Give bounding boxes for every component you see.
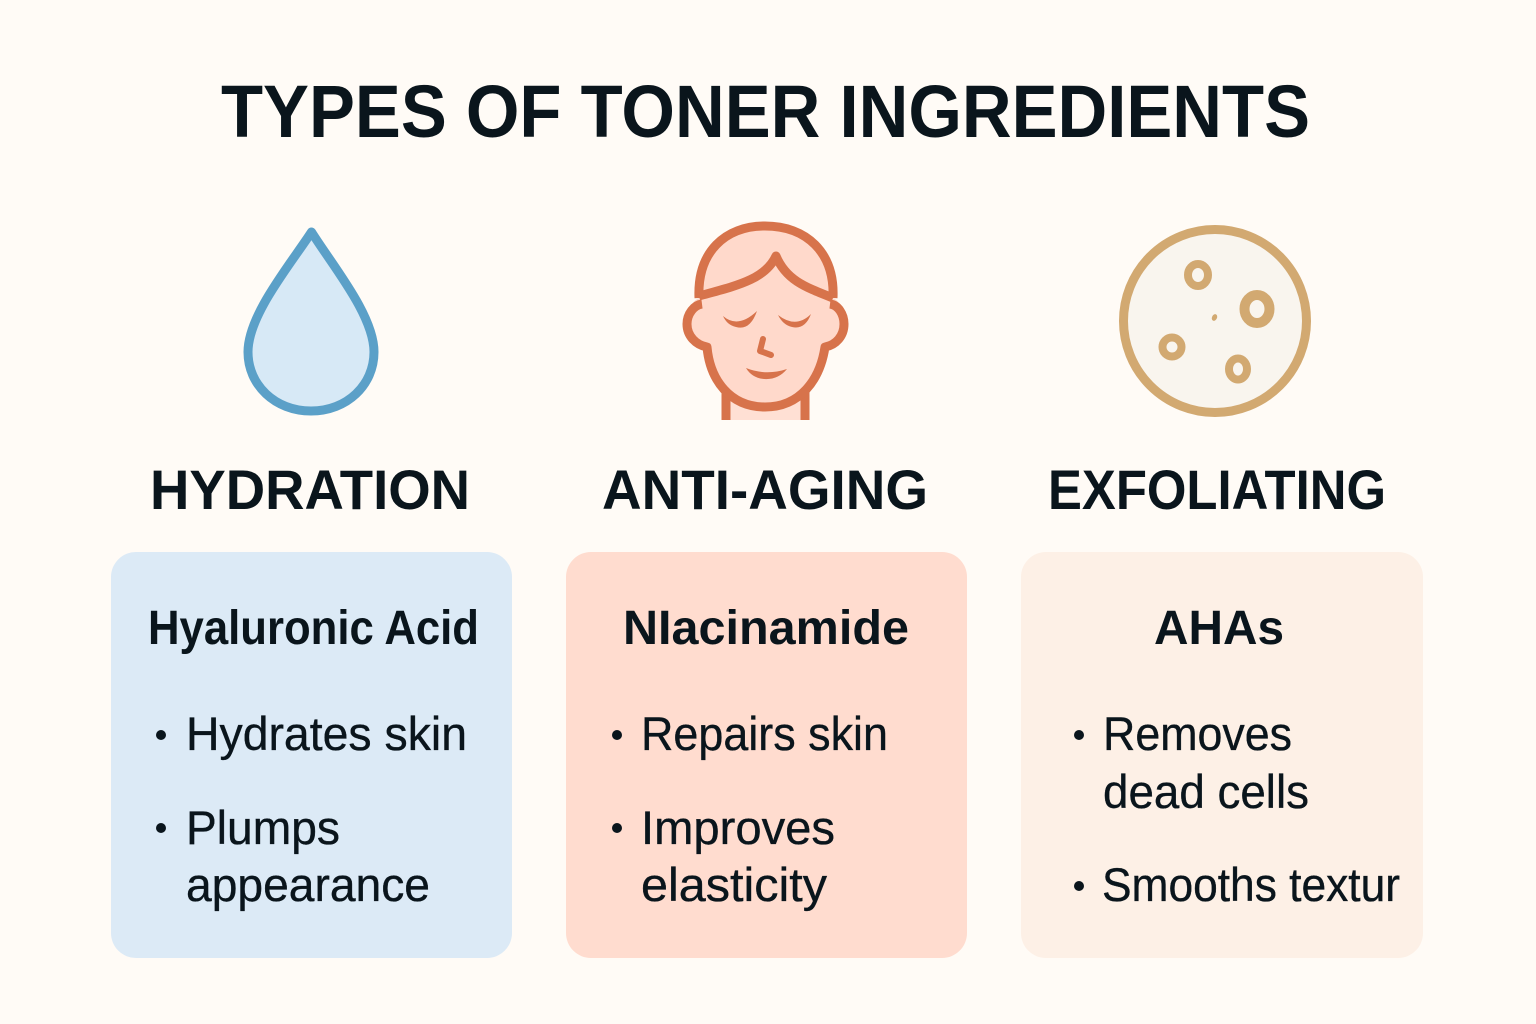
bullet: plumps appearance: appearance — [186, 858, 430, 911]
ingredient name: AHAs — [1154, 602, 1284, 655]
panel: anti-aging — [566, 552, 967, 958]
title: TYPES OF TONER INGREDIENTS — [221, 70, 1310, 153]
bullet: plumps appearance: Plumps — [186, 801, 340, 854]
heading: anti-aging: ANTI-AGING — [602, 458, 928, 521]
bullet: removes dead cells — [1074, 707, 1309, 818]
bullet: improves elasticity — [612, 801, 835, 911]
bullet: hydrates skin: Hydrates skin — [186, 707, 467, 760]
bullet: removes dead cells: dead cells — [1103, 765, 1309, 818]
bullet: smooths texture: Smooths textur — [1102, 858, 1400, 911]
panel: hydration — [111, 552, 512, 958]
heading: hydration: HYDRATION — [150, 458, 470, 521]
bullet: repairs skin: Repairs skin — [641, 707, 888, 760]
bullet: improves elasticity: elasticity — [641, 858, 828, 911]
bullet: removes dead cells: Removes — [1103, 707, 1292, 760]
icon: water drop — [248, 232, 374, 411]
icon: skin pores — [1124, 230, 1306, 412]
mouth — [746, 368, 787, 379]
bullet: improves elasticity: Improves — [641, 801, 835, 854]
ingredient name: Hyaluronic Acid — [148, 602, 479, 655]
heading: exfoliating: EXFOLIATING — [1048, 458, 1386, 521]
bullet: plumps appearance — [156, 801, 430, 911]
nose — [760, 339, 771, 355]
ingredient name: NIacinamide — [623, 602, 909, 655]
right eye — [778, 314, 811, 327]
icon: face — [687, 226, 844, 420]
left eye — [723, 311, 757, 328]
panel: exfoliating — [1021, 552, 1423, 958]
